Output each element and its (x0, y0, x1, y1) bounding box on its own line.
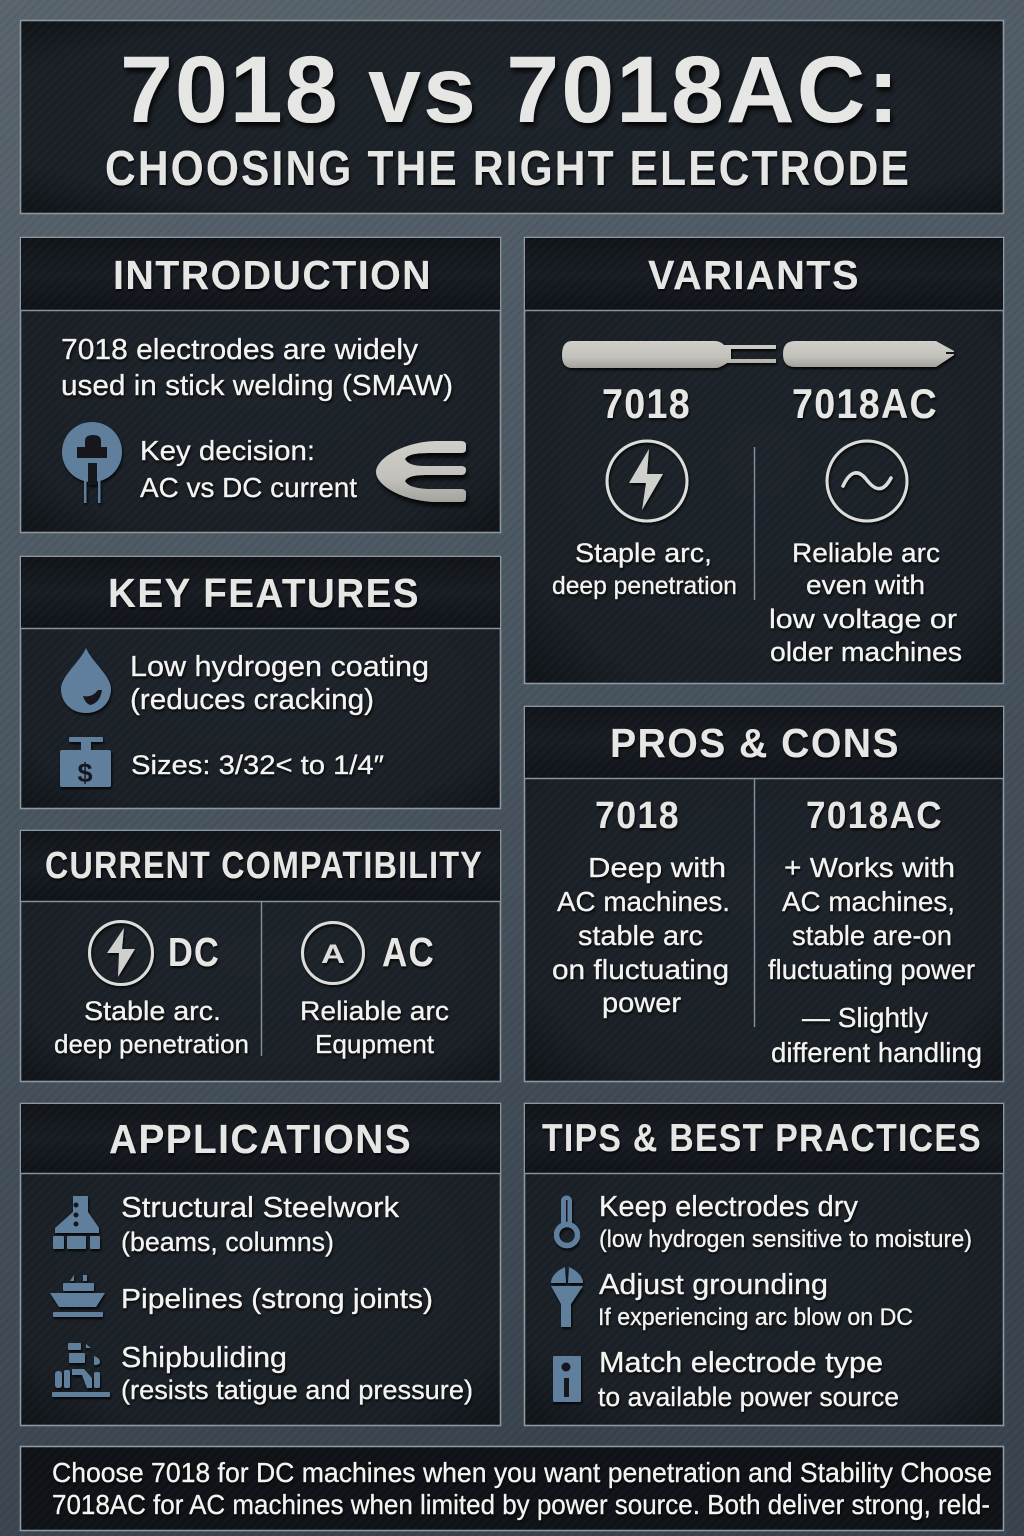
text: 7018AC pros: fluctuating power (768, 954, 975, 985)
text: low hydrogen coating: (reduces cracking) (130, 684, 374, 716)
heading: variants: VARIANTS (648, 252, 860, 298)
icon: DC lightning bolt (607, 441, 687, 521)
label: 7018AC: 7018AC (792, 380, 938, 427)
label: AC: AC (382, 929, 435, 975)
text: intro description (61, 334, 453, 402)
text: structural steelwork: Structural Steelwork (121, 1192, 400, 1224)
text: adjust grounding: Adjust grounding (599, 1269, 828, 1301)
text: low hydrogen coating (130, 651, 429, 716)
text: 7018AC pros: + Works with (784, 852, 955, 883)
text: conclusion (52, 1457, 992, 1520)
panel: title (20, 20, 1004, 214)
text: intro description: used in stick welding (SMAW) (61, 370, 453, 402)
heading: pros and cons: PROS & CONS (610, 720, 900, 766)
text: 7018AC pros: stable are-on (792, 920, 952, 951)
text: low hydrogen coating: Low hydrogen coating (130, 651, 429, 683)
text: 7018 pros (552, 852, 730, 1018)
text: 7018 variant description (552, 538, 737, 600)
text: keep electrodes dry (599, 1191, 972, 1253)
text: 7018AC variant description: low voltage or (769, 604, 957, 634)
text: structural steelwork (121, 1192, 400, 1257)
heading: applications: APPLICATIONS (109, 1116, 412, 1162)
icon: electrode holder (62, 422, 122, 503)
panel: introduction (20, 238, 500, 532)
text: shipbuilding: Shipbuliding (121, 1342, 287, 1374)
heading: current compatibility: CURRENT COMPATIBILITY (45, 845, 483, 887)
text: adjust grounding (598, 1269, 913, 1331)
icon: water drop (61, 648, 111, 713)
text: conclusion: Choose 7018 for DC machines when you want penetration and Stability Choose (52, 1457, 992, 1488)
icon: 7018 electrode rod (562, 341, 776, 368)
icon: thermometer (556, 1196, 578, 1246)
icon: shipbuilding machinery (52, 1343, 110, 1397)
label: 7018: 7018 (595, 795, 680, 837)
text: match electrode type: to available power source (598, 1382, 899, 1412)
text: DC description (54, 996, 249, 1059)
AC column (300, 922, 449, 1059)
label: 7018AC: 7018AC (806, 795, 943, 837)
text: 7018AC pros: AC machines, (782, 886, 955, 917)
subtitle: CHOOSING THE RIGHT ELECTRODE (105, 142, 911, 196)
text: 7018AC variant description: older machines (770, 637, 962, 667)
text: shipbuilding (121, 1342, 473, 1405)
text: match electrode type (598, 1347, 899, 1412)
text: key decision: Key decision: (140, 435, 315, 466)
text: 7018 pros: on fluctuating (552, 954, 729, 985)
text: AC description: Reliable arc (300, 996, 449, 1026)
text: 7018 variant description: deep penetration (552, 572, 737, 600)
text: AC description (300, 996, 449, 1059)
icon: information plate (553, 1356, 581, 1402)
DC column (54, 922, 249, 1059)
label: 7018: 7018 (602, 380, 691, 427)
panel: current compatibility (20, 830, 500, 1082)
panel: conclusion (20, 1446, 1004, 1530)
text: structural steelwork: (beams, columns) (121, 1227, 334, 1257)
panel: applications (20, 1104, 500, 1426)
icon: AC letter circle: A (321, 939, 345, 969)
text: keep electrodes dry: Keep electrodes dry (599, 1191, 858, 1223)
heading: key features: KEY FEATURES (108, 570, 420, 616)
heading: introduction: INTRODUCTION (113, 252, 432, 298)
panel: key features (20, 556, 500, 808)
text: 7018AC cons: different handling (771, 1037, 982, 1068)
icon: weight with dollar sign: $ (77, 758, 93, 788)
text: shipbuilding: (resists tatigue and pressure) (121, 1375, 473, 1405)
panel: pros and cons (524, 706, 1004, 1082)
text: key decision: AC vs DC current (140, 472, 357, 503)
icon: DC lightning bolt (90, 922, 152, 984)
text: 7018AC variant description: even with (806, 570, 925, 600)
text: AC description: Equpment (315, 1029, 435, 1059)
icon: wrench (551, 1267, 583, 1327)
text: 7018 pros: stable arc (578, 920, 703, 951)
text: keep electrodes dry: (low hydrogen sensitive to moisture) (599, 1226, 972, 1253)
text: 7018 pros: power (602, 987, 681, 1018)
text: 7018AC variant description: Reliable arc (792, 538, 940, 568)
text: intro description: 7018 electrodes are widely (61, 334, 419, 366)
text: 7018AC cons (771, 1002, 982, 1068)
text: key decision (140, 435, 357, 503)
title: 7018 vs 7018AC: (120, 37, 901, 143)
icon: AC sine wave (827, 441, 907, 521)
text: 7018 variant description: Staple arc, (575, 538, 712, 568)
icon: electrode fork (376, 441, 466, 502)
text: DC description: deep penetration (54, 1029, 249, 1059)
panel: variants (524, 238, 1004, 684)
panel: tips and best practices (524, 1104, 1004, 1426)
icon: AC letter circle (302, 922, 364, 984)
text: match electrode type: Match electrode type (599, 1347, 883, 1379)
icon: 7018AC electrode rod (783, 341, 954, 367)
icon: weight with dollar sign (60, 737, 111, 788)
text: 7018 pros: AC machines. (557, 886, 730, 917)
text: sizes: Sizes: 3/32˂ to 1/4″ (131, 750, 384, 780)
text: adjust grounding: If experiencing arc blow on DC (598, 1304, 913, 1331)
label: DC: DC (168, 929, 220, 975)
text: pipelines: Pipelines (strong joints) (121, 1283, 433, 1314)
text: 7018 pros: Deep with (588, 852, 726, 883)
text: 7018AC cons: — Slightly (802, 1002, 928, 1033)
text: DC description: Stable arc. (84, 996, 221, 1026)
text: 7018AC variant description (769, 538, 962, 667)
icon: structural column (53, 1196, 100, 1249)
text: 7018AC pros (768, 852, 975, 985)
icon: pipeline vessel (50, 1275, 105, 1317)
